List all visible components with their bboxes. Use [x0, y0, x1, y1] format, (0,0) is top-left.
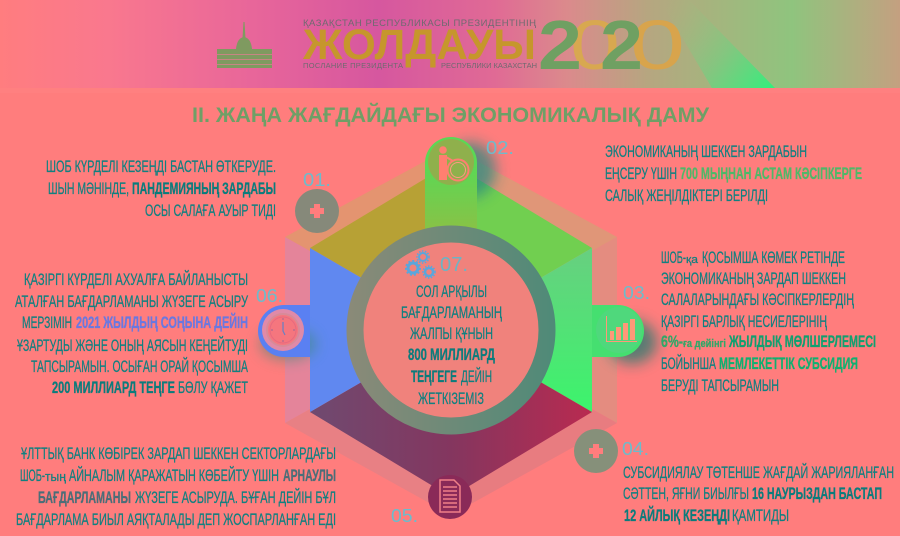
sector: top left [310, 163, 451, 330]
text block 03 [661, 248, 876, 395]
text block 05: ШОБ- [20, 466, 45, 485]
logo subtitle russian right: РЕСПУБЛИКИ КАЗАХСТАН [441, 61, 537, 70]
sector: bottom [310, 330, 592, 497]
node 05 [428, 475, 472, 519]
hexagon diagram [285, 147, 617, 515]
text block 05: БАҒДАРЛАМАНЫ [38, 488, 131, 507]
number 01: 01. [303, 170, 331, 190]
outer pale hexagon [285, 147, 617, 515]
icon: presidential palace [217, 22, 272, 68]
text block 05: ҰЛТТЫҚ БАНК КӨБІРЕК ЗАРДАП ШЕККЕН СЕКТОРЛАРДАҒЫ [21, 444, 336, 463]
node 04 [574, 429, 618, 473]
logo two one: 2 [538, 6, 582, 84]
icon: bar chart [606, 316, 637, 342]
text block 04: 12 АЙЛЫҚ КЕЗЕҢДІ [624, 506, 730, 525]
center text [401, 254, 502, 408]
logo word: ЖОЛДАУЫ [302, 21, 536, 69]
icon: plus [589, 444, 603, 458]
number 05: 05. [391, 506, 418, 526]
logo zero two: 0 [630, 6, 685, 84]
number 04: 04. [622, 439, 649, 459]
icon: document [440, 480, 460, 512]
text block 06: ҚАЗІРГІ КҮРДЕЛІ АХУАЛҒА БАЙЛАНЫСТЫ [24, 270, 248, 289]
center text: 800 МИЛЛИАРД [408, 345, 495, 364]
text block 05: ЖҮЗЕГЕ АСЫРУДА. БҰҒАН ДЕЙІН БҰЛ [135, 488, 336, 507]
center text: ДЕЙІН [461, 367, 492, 386]
center text: ЖЕТКІЗЕМІЗ [418, 389, 484, 408]
text block 06: 2021 ЖЫЛДЫҢ СОҢЫНА ДЕЙІН [76, 313, 248, 332]
text block 02 [605, 142, 862, 205]
header band [0, 0, 900, 93]
text block 02: ЕҢСЕРУ ҮШІН [605, 164, 677, 183]
icon: plus [310, 204, 324, 218]
text block 06: ТАПСЫРАМЫН. ОСЫҒАН ОРАЙ ҚОСЫМША [31, 357, 248, 376]
icon: gears [406, 251, 435, 278]
text block 01: ШОБ КҮРДЕЛІ КЕЗЕҢДІ БАСТАН ӨТКЕРУДЕ. [46, 157, 276, 176]
number 06: 06. [256, 286, 283, 306]
text block 06: ҰЗАРТУДЫ ЖӘНЕ ОНЫҢ АЯСЫН КЕҢЕЙТУДІ [17, 336, 248, 355]
node 06 tab [258, 305, 316, 360]
sector: top right [451, 163, 592, 330]
logo zero one: 0 [570, 6, 620, 84]
logo subtitle kazakh: ҚАЗАҚСТАН РЕСПУБЛИКАСЫ ПРЕЗИДЕНТІНІҢ [303, 18, 536, 29]
sector: right [451, 248, 592, 412]
number 02: 02. [486, 138, 514, 158]
text block 02: САЛЫҚ ЖЕҢІЛДІКТЕРІ БЕРІЛДІ [605, 186, 768, 205]
number 03: 03. [623, 283, 650, 303]
text block 05: тың [45, 469, 67, 484]
node 01 [295, 189, 339, 233]
text block 01 [46, 157, 276, 220]
text block 01: ПАНДЕМИЯНЫҢ ЗАРДАБЫ [132, 179, 276, 198]
text block 01: ОСЫ САЛАҒА АУЫР ТИДІ [145, 201, 276, 220]
text block 01: ШЫН МӘНІНДЕ, [48, 179, 129, 198]
text block 03: ШОБ- [661, 248, 686, 267]
central ring [355, 234, 547, 426]
icon: clock [267, 314, 299, 346]
text block 04: ҚАМТИДЫ [732, 506, 789, 525]
title: ІІ. ЖАҢА ЖАҒДАЙДАҒЫ ЭКОНОМИКАЛЫҚ ДАМУ [192, 103, 710, 127]
text block 03: ға дейінгі [683, 338, 726, 350]
text block 06 [15, 270, 248, 397]
icon: businessman and ring [439, 146, 468, 180]
center text: ТЕҢГЕГЕ [411, 367, 457, 386]
text block 03: БОЙЫНША [661, 354, 716, 373]
node 03 tab [592, 305, 657, 364]
text block 05: АЙНАЛЫМ ҚАРАЖАТЫН КӨБЕЙТУ ҮШІН [69, 466, 279, 485]
text block 04 [623, 463, 894, 525]
logo: Zholdauy 2020 [302, 6, 685, 84]
text block 06: БӨЛУ ҚАЖЕТ [178, 378, 248, 397]
text block 03: қа [686, 254, 699, 266]
sector: left [310, 248, 451, 412]
node 02 tab [425, 137, 496, 235]
text block 05: БАҒДАРЛАМА БИЫЛ АЯҚТАЛАДЫ ДЕП ЖОСПАРЛАНҒАН ЕДІ [16, 510, 336, 529]
number 07: 07. [440, 254, 468, 276]
text block 06: МЕРЗІМІН [22, 313, 72, 332]
logo two two: 2 [600, 6, 643, 84]
text block 05: АРНАУЛЫ [283, 466, 336, 485]
text block 05 [16, 444, 336, 529]
text block 06: 200 МИЛЛИАРД ТЕҢГЕ [52, 378, 175, 397]
text block 06: АТАЛҒАН БАҒДАРЛАМАНЫ ЖҮЗЕГЕ АСЫРУ [15, 292, 248, 311]
text block 04: СӘТТЕН, ЯҒНИ БИЫЛҒЫ [623, 484, 749, 503]
center text: БАҒДАРЛАМАНЫҢ [401, 303, 502, 322]
center text: СОЛ АРҚЫЛЫ [416, 282, 487, 301]
center text: ЖАЛПЫ ҚҰНЫН [410, 324, 493, 343]
logo subtitle russian left: ПОСЛАНИЕ ПРЕЗИДЕНТА [303, 61, 403, 70]
text block 03: БЕРУДІ ТАПСЫРАМЫН [661, 376, 779, 395]
text block 03: 6%- [661, 332, 683, 351]
